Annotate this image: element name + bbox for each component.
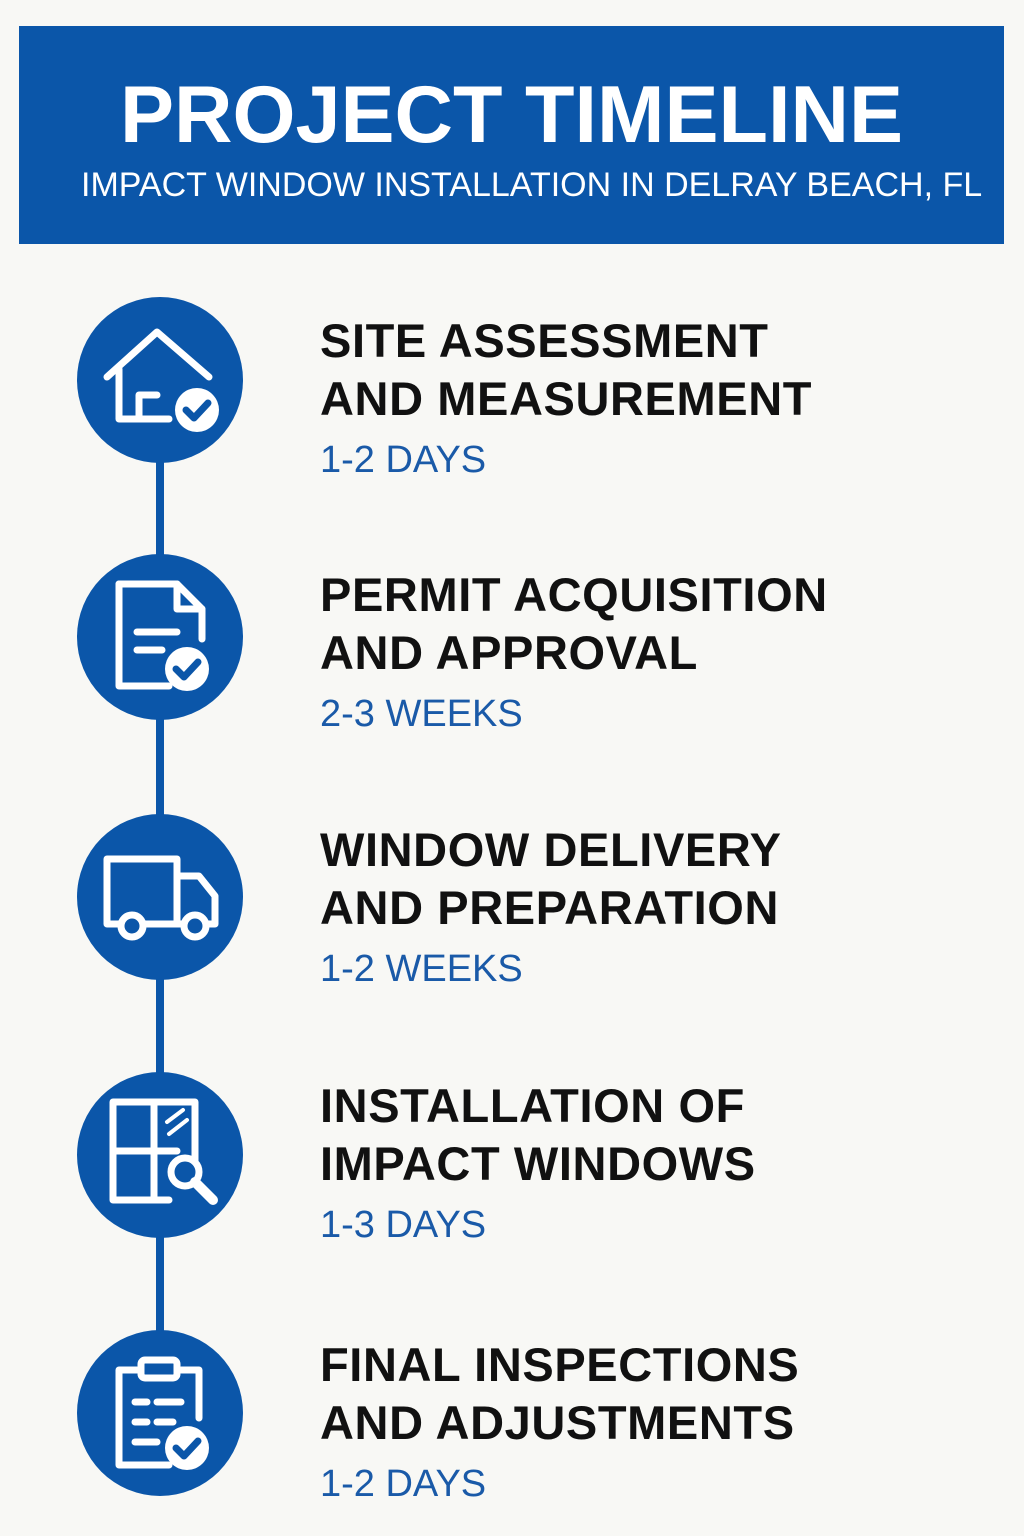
step 2 text <box>320 568 828 735</box>
step 3 text: 1-2 WEEKS <box>320 948 523 990</box>
step 5 text <box>320 1338 799 1505</box>
icon: truck <box>77 814 243 980</box>
subtitle: IMPACT WINDOW INSTALLATION IN DELRAY BEACH, FL <box>81 166 982 204</box>
icon: clipboard with check <box>77 1330 243 1496</box>
icon: house with check <box>77 297 243 463</box>
step 1 text <box>320 314 812 481</box>
step 1 text: AND MEASUREMENT <box>320 372 812 425</box>
step 1 text: SITE ASSESSMENT <box>320 314 769 367</box>
step 4 text: 1-3 DAYS <box>320 1204 486 1246</box>
step 4 text: INSTALLATION OF <box>320 1079 745 1132</box>
step 5 text: AND ADJUSTMENTS <box>320 1396 795 1449</box>
step 2 text: PERMIT ACQUISITION <box>320 568 828 621</box>
step 5 text: FINAL INSPECTIONS <box>320 1338 799 1391</box>
title: PROJECT TIMELINE <box>120 70 903 160</box>
step 2 text: AND APPROVAL <box>320 626 698 679</box>
step 1 text: 1-2 DAYS <box>320 439 486 481</box>
step 4 text: IMPACT WINDOWS <box>320 1137 756 1190</box>
step 5 text: 1-2 DAYS <box>320 1463 486 1505</box>
step 4 text <box>320 1079 756 1246</box>
step 2 text: 2-3 WEEKS <box>320 693 523 735</box>
icon: document with check <box>77 554 243 720</box>
step 3 text <box>320 823 782 990</box>
step 3 text: AND PREPARATION <box>320 881 779 934</box>
timeline connector line <box>156 380 164 1420</box>
header banner <box>19 26 1004 244</box>
step 3 text: WINDOW DELIVERY <box>320 823 782 876</box>
icon: window with magnifier <box>77 1072 243 1238</box>
